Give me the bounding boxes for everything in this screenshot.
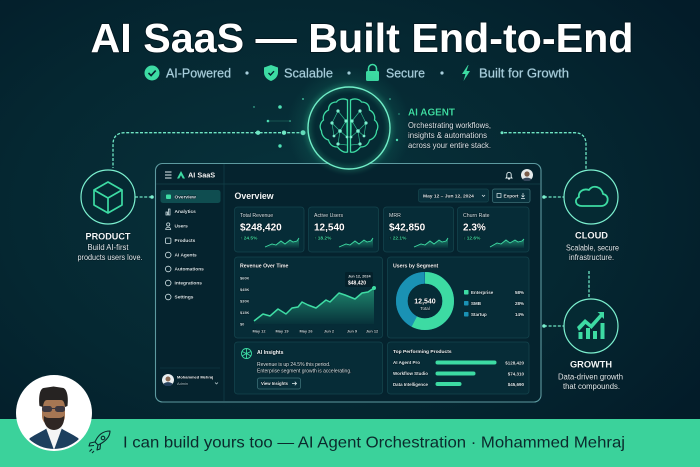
x axis labels: Jun 12 bbox=[366, 328, 379, 334]
x axis labels bbox=[253, 328, 379, 334]
KPI: Total Revenue: ↑ 24.5% bbox=[240, 236, 258, 242]
logo: AI SaaS bbox=[188, 171, 215, 180]
header controls bbox=[418, 169, 533, 202]
icon: cube bbox=[94, 182, 122, 213]
callout: AI Agent: insights & automations bbox=[408, 131, 487, 140]
tooltip bbox=[345, 272, 373, 287]
chart: Revenue Over Time: Revenue Over Time bbox=[240, 264, 288, 270]
KPI: Active Users: 12,540 bbox=[314, 222, 345, 234]
node: Growth: that compounds. bbox=[563, 382, 620, 391]
KPI: Total Revenue bbox=[234, 207, 304, 252]
panel: AI Insights bbox=[234, 342, 382, 394]
nav active: Overview bbox=[174, 195, 196, 201]
row: AI Agent Pro bbox=[393, 360, 524, 366]
donut: Total bbox=[420, 306, 430, 311]
nav: Users: Users bbox=[174, 224, 188, 230]
icon: bell bbox=[506, 172, 512, 179]
callout: AI Agent bbox=[408, 108, 491, 150]
KPI: Churn Rate: Churn Rate bbox=[463, 213, 490, 219]
row: Workflow Studio: Workflow Studio bbox=[393, 371, 428, 376]
area series bbox=[254, 288, 374, 324]
row: AI Agent Pro: $128,420 bbox=[505, 360, 524, 366]
node: Cloud: Scalable, secure bbox=[566, 244, 619, 252]
connector bbox=[135, 195, 154, 199]
x axis labels: May 26 bbox=[300, 328, 313, 334]
node: Product: Build AI-first bbox=[88, 243, 129, 252]
icon: menu bbox=[165, 172, 172, 178]
nav: Settings: Settings bbox=[174, 295, 194, 301]
panel: AI Insights: Enterprise segment growth is accelerating. bbox=[257, 368, 352, 374]
tooltip: $48,420 bbox=[348, 280, 366, 286]
label: Secure: Secure bbox=[386, 66, 425, 80]
node: Growth bbox=[542, 299, 623, 391]
legend: 58% bbox=[515, 290, 524, 295]
nav: Settings bbox=[165, 294, 194, 301]
KPI: MRR: ↑ 22.1% bbox=[389, 236, 407, 242]
node: Cloud: CLOUD bbox=[575, 230, 608, 242]
KPI: Active Users: ↑ 18.2% bbox=[314, 236, 332, 242]
nav: Automations bbox=[165, 266, 204, 273]
nav: Products: Products bbox=[174, 238, 196, 244]
connector: brain to product bbox=[113, 130, 306, 168]
title: AI SaaS — Built End-to-End bbox=[90, 15, 634, 61]
callout: AI Agent: Orchestrating workflows, bbox=[408, 121, 491, 130]
KPI: Total Revenue: Total Revenue bbox=[240, 213, 273, 219]
node: Cloud: infrastructure. bbox=[569, 253, 614, 262]
sidebar bbox=[160, 171, 220, 386]
icon: rocket bbox=[89, 431, 110, 453]
KPI: Churn Rate bbox=[458, 207, 529, 252]
tooltip: Jun 12, 2024 bbox=[348, 274, 371, 278]
x axis labels: May 12 bbox=[253, 328, 266, 334]
line series bbox=[254, 288, 374, 321]
network dots bbox=[253, 98, 400, 148]
connector bbox=[542, 195, 564, 199]
row: AI Agent Pro: AI Agent Pro bbox=[393, 360, 420, 365]
donut: 12,540 bbox=[414, 298, 436, 306]
user chip: Mohammed Mehraj bbox=[177, 374, 213, 380]
nav: AI Agents: AI Agents bbox=[174, 253, 197, 259]
KPI: Churn Rate: ↓ 12.6% bbox=[463, 236, 481, 242]
legend: 14% bbox=[515, 312, 524, 317]
callout: AI Agent: AI AGENT bbox=[408, 108, 455, 118]
row: Data Intelligence bbox=[393, 382, 524, 387]
date picker: May 12 – Jun 12, 2024 bbox=[423, 193, 474, 199]
ring bbox=[81, 170, 135, 224]
y axis labels: $45K bbox=[240, 287, 249, 292]
donut bbox=[402, 278, 448, 324]
KPI: MRR: $42,850 bbox=[389, 222, 426, 234]
legend: Startup bbox=[471, 312, 487, 317]
x axis labels: May 19 bbox=[276, 328, 289, 334]
nav: Analytics: Analytics bbox=[174, 209, 196, 215]
KPI: MRR bbox=[384, 207, 454, 252]
icon: bolt bbox=[462, 65, 470, 81]
label: Built for Growth: Built for Growth bbox=[479, 66, 569, 80]
y axis labels: $30K bbox=[240, 298, 249, 304]
nav: Automations: Automations bbox=[174, 267, 204, 273]
label: Scalable: Scalable bbox=[284, 66, 333, 80]
panel: AI Insights: AI Insights bbox=[257, 350, 284, 356]
icon: lock bbox=[366, 64, 379, 81]
connector: agent to cloud bbox=[500, 131, 586, 170]
KPI: Churn Rate: 2.3% bbox=[463, 222, 486, 234]
row: Workflow Studio: $74,310 bbox=[508, 372, 524, 376]
avatar small bbox=[521, 169, 533, 181]
panel: Top Performing Products bbox=[388, 342, 529, 394]
callout: AI Agent: across your entire stack. bbox=[408, 141, 491, 150]
heading: Overview: Overview bbox=[234, 191, 274, 201]
user chip: Admin bbox=[177, 381, 188, 386]
KPI: MRR: MRR bbox=[389, 213, 401, 219]
x axis labels: Jun 9 bbox=[347, 328, 358, 334]
footer message: I can build yours too — AI Agent Orchestration · Mohammed Mehraj bbox=[123, 434, 625, 452]
feature strip bbox=[144, 64, 569, 81]
export button: Export bbox=[504, 194, 519, 200]
chart: Users by Segment bbox=[388, 257, 529, 338]
row: Data Intelligence: Data Intelligence bbox=[393, 382, 428, 387]
legend bbox=[464, 290, 524, 317]
icon: check badge bbox=[144, 66, 160, 80]
connector bbox=[542, 324, 564, 328]
node: Product bbox=[78, 170, 154, 262]
x axis labels: Jun 2 bbox=[324, 328, 335, 334]
y axis labels bbox=[240, 276, 249, 326]
node: Cloud bbox=[542, 170, 619, 262]
y axis labels: $60K bbox=[240, 276, 249, 280]
legend: Enterprise bbox=[471, 290, 494, 295]
legend: 28% bbox=[515, 301, 524, 306]
y axis labels: $0 bbox=[240, 322, 244, 326]
legend: SMB bbox=[471, 301, 482, 306]
portrait avatar bbox=[16, 375, 92, 454]
chart: Revenue Over Time bbox=[234, 257, 382, 338]
button: View Insights bbox=[258, 378, 300, 389]
chart: Users by Segment: Users by Segment bbox=[393, 264, 439, 270]
nav: Integrations: Integrations bbox=[174, 281, 202, 287]
nav: Analytics bbox=[166, 209, 196, 215]
node: Product: products users love. bbox=[78, 253, 142, 262]
icon: brain agent bbox=[308, 87, 390, 169]
y axis labels: $15K bbox=[240, 310, 249, 315]
panel: Top Performing Products: Top Performing Products bbox=[393, 349, 452, 355]
panel: AI Insights: Revenue is up 24.5% this period. bbox=[257, 362, 330, 368]
icon: cloud bbox=[576, 187, 608, 206]
icon: mini brain bbox=[242, 348, 252, 358]
nav: Products bbox=[166, 238, 196, 244]
connector: brain down to panel bbox=[347, 168, 351, 205]
node: Growth: GROWTH bbox=[570, 360, 612, 370]
nav: AI Agents bbox=[165, 252, 197, 259]
panel: dashboard bbox=[156, 164, 541, 402]
nav: Integrations bbox=[165, 280, 202, 287]
nav active bbox=[160, 190, 220, 203]
label: AI-Powered: AI-Powered bbox=[166, 66, 231, 80]
row: Workflow Studio bbox=[393, 371, 524, 376]
connector: cloud to growth bbox=[588, 271, 590, 298]
footer band bbox=[0, 419, 700, 467]
KPI: Active Users bbox=[308, 207, 378, 252]
KPI: Total Revenue: $248,420 bbox=[240, 222, 282, 234]
icon: growth chart bbox=[577, 312, 604, 339]
button: View Insights: View Insights bbox=[261, 381, 288, 386]
icon: shield bbox=[264, 65, 278, 81]
node: Product: PRODUCT bbox=[86, 232, 131, 242]
user chip bbox=[160, 368, 220, 386]
node: Growth: Data-driven growth bbox=[558, 372, 623, 382]
brain halo bbox=[287, 66, 411, 190]
row: Data Intelligence: $45,690 bbox=[508, 382, 524, 387]
KPI: Active Users: Active Users bbox=[314, 213, 344, 219]
nav: Users bbox=[166, 223, 188, 230]
